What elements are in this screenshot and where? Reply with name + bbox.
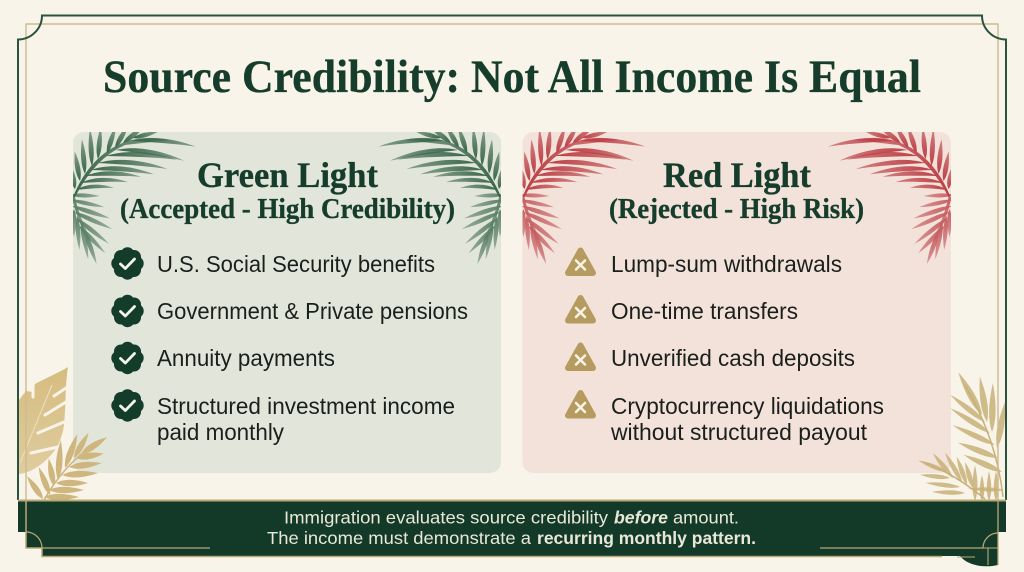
- accepted income list: [108, 244, 468, 445]
- item: pensions: [108, 292, 468, 330]
- banner message: recurring monthly pattern.: [537, 528, 756, 548]
- green panel heading: [120, 155, 455, 225]
- banner message: The income must demonstrate a: [267, 528, 531, 548]
- red palm fronds: [519, 124, 954, 265]
- red panel background: [522, 132, 951, 473]
- green palm fronds: [70, 124, 504, 265]
- panel: green light: [70, 124, 504, 473]
- item: annuity: [108, 339, 335, 377]
- banner message: Immigration evaluates source credibility: [284, 508, 608, 528]
- item: social security: [108, 244, 435, 283]
- item: cryptocurrency: Cryptocurrency liquidations: [611, 393, 884, 419]
- red panel heading: Red Light: [663, 155, 811, 195]
- item: one-time: One-time transfers: [611, 298, 798, 324]
- item: structured investment: [108, 386, 455, 445]
- green panel heading: (Accepted - High Credibility): [120, 194, 455, 225]
- gold palm fronds, bottom right: [917, 370, 1008, 501]
- banner message: before: [614, 508, 668, 528]
- item: social security: U.S. Social Security benefits: [157, 251, 435, 277]
- item: cryptocurrency: [568, 393, 884, 445]
- gold monstera leaf, bottom left: [19, 367, 68, 474]
- item: structured investment: paid monthly: [157, 419, 284, 445]
- banner message: amount.: [673, 508, 739, 528]
- gold palm frond, bottom left: [24, 431, 109, 501]
- banner gold trim: [18, 500, 1006, 565]
- red panel heading: [609, 155, 864, 225]
- red panel heading: (Rejected - High Risk): [609, 194, 864, 225]
- banner message: [267, 508, 756, 548]
- rejected income list: [568, 250, 884, 445]
- panel: red light: [519, 124, 954, 473]
- green panel background: [73, 132, 501, 473]
- item: cash deposits: Unverified cash deposits: [611, 345, 855, 371]
- item: structured investment: Structured investment income: [157, 393, 455, 419]
- item: cryptocurrency: without structured payout: [610, 419, 867, 445]
- item: annuity: Annuity payments: [157, 345, 335, 371]
- item: pensions: Government & Private pensions: [157, 298, 468, 324]
- bottom banner: [18, 500, 1006, 566]
- banner background: [18, 500, 1006, 566]
- title: Source Credibility: Not All Income Is Equal: [103, 51, 921, 103]
- green panel heading: Green Light: [197, 155, 378, 195]
- item: lump-sum: Lump-sum withdrawals: [611, 251, 842, 277]
